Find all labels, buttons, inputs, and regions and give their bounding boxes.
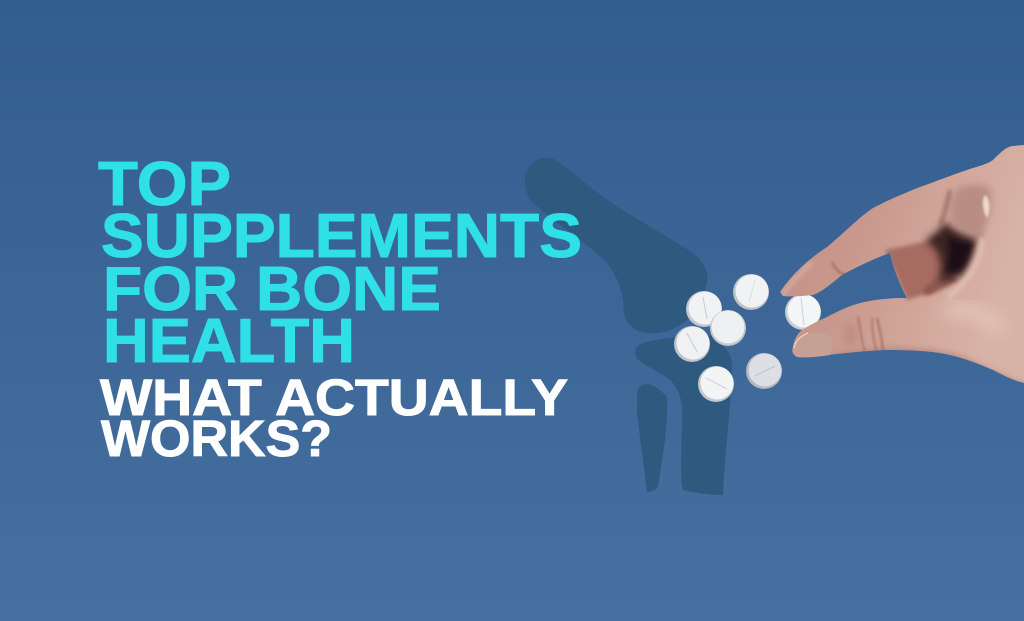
subtitle: what actually works: WHAT ACTUALLY [100,369,568,426]
femur [525,158,707,333]
subtitle: what actually works [100,369,568,467]
pill held between fingers [785,294,821,330]
knee bones silhouette [525,158,732,495]
pill 3 [710,310,746,346]
thumb creases [858,316,883,352]
pill 2 [686,291,722,327]
thumbnail rim [794,333,808,348]
title: top supplements for bone health: TOP [98,150,231,219]
hand shading [782,184,1024,396]
fibula [637,384,667,492]
title: top supplements for bone health: FOR BONE [103,255,441,324]
title: top supplements for bone health: SUPPLEMENTS [101,202,582,271]
subtitle: what actually works: WORKS? [101,410,332,467]
tibia [635,336,732,495]
hand holding a pill [780,145,1024,396]
hand shape [780,145,1024,383]
thumbnail [794,333,832,357]
pill 4 [674,326,710,362]
pill 1 [733,274,769,310]
scattered pills [674,274,782,402]
title: top supplements for bone health [98,150,582,376]
pill 6 [746,353,782,389]
title: top supplements for bone health: HEALTH [103,307,355,376]
pill 5 [698,366,734,402]
